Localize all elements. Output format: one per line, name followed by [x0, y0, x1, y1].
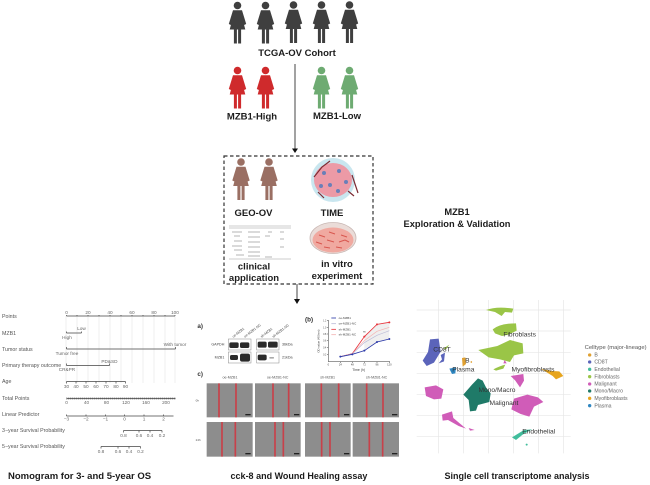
wound healing images: 24h	[196, 438, 201, 442]
chart: nomogram: 5−year Survival Probability	[2, 444, 65, 450]
western blot: sh-MZB1	[260, 327, 273, 339]
panel labels a b c: a)	[197, 323, 203, 330]
cluster: B cells	[462, 357, 472, 367]
heading: nomogram: Nomogram for 3- and 5-year OS	[8, 471, 151, 482]
cluster: Mono/Macro	[463, 378, 491, 411]
chart: nomogram: 40	[107, 310, 113, 315]
chart: nomogram: 0.8	[98, 449, 105, 454]
icon group: TCGA-OV cohort people	[229, 1, 358, 43]
chart: nomogram: PD&SD	[101, 359, 118, 364]
cluster labels: Plasma	[452, 366, 475, 373]
line chart: CCK-8: sh-MZB1-NC	[339, 333, 357, 337]
icon group: MZB1-High people	[229, 67, 274, 108]
western blot: 36kDa	[282, 343, 294, 347]
line chart: CCK-8: oe-MZB1	[339, 316, 351, 320]
chart: nomogram: 30	[64, 384, 69, 389]
chart: nomogram: −3	[64, 416, 70, 422]
label: GEO-OV: GEO-OV	[234, 208, 273, 219]
western blot: GAPDH	[211, 343, 225, 347]
chart: nomogram: Low	[77, 326, 86, 331]
chart: nomogram: Primary therapy outcome	[2, 363, 61, 369]
line chart: CCK-8: 0	[328, 363, 330, 367]
line chart: CCK-8: 0.8	[323, 334, 327, 336]
chart: nomogram: 0.2	[159, 433, 166, 438]
chart: nomogram: MZB1	[2, 331, 16, 337]
chart: nomogram: 70	[103, 384, 109, 389]
panel: exploration box	[224, 156, 373, 284]
western blot	[211, 323, 294, 363]
panel labels a b c: (b)	[305, 317, 313, 324]
icon: petri dish	[310, 222, 356, 254]
chart: nomogram: 0.6	[115, 449, 122, 454]
label: clinical application: clinical	[238, 262, 270, 272]
western blot: 21kDa	[282, 356, 294, 360]
line chart: CCK-8: 1.2	[323, 321, 327, 323]
chart: nomogram	[2, 310, 187, 454]
chart: nomogram: 0.6	[136, 433, 143, 438]
line chart: CCK-8: 120	[387, 363, 392, 367]
chart: nomogram: 0.2	[137, 449, 144, 454]
line chart: CCK-8: 96	[376, 363, 379, 367]
legend: cell type: B	[594, 353, 598, 359]
line chart: CCK-8: 0.4	[323, 348, 327, 350]
chart: single-cell UMAP	[417, 300, 647, 453]
chart: nomogram: 3−year Survival Probability	[2, 428, 65, 434]
chart: nomogram: 0	[123, 416, 126, 422]
chart: nomogram: Tumor status	[2, 347, 33, 353]
line chart: CCK-8: 0.6	[323, 341, 327, 343]
heading: MZB1-High: MZB1-High	[227, 112, 277, 122]
chart: nomogram: 80	[151, 310, 157, 315]
chart: nomogram: Points	[2, 314, 17, 320]
line chart: CCK-8: oe-MZB1-NC	[339, 322, 357, 326]
line chart: CCK-8: 0.2	[323, 355, 327, 357]
line chart: CCK-8: 72	[363, 363, 366, 367]
cluster labels: CD8T	[433, 346, 451, 353]
chart: nomogram: −2	[83, 416, 89, 422]
chart: nomogram: 100	[171, 310, 179, 315]
wound healing images: 0h	[196, 398, 199, 402]
line chart: CCK-8: 24	[339, 363, 342, 367]
chart: nomogram: 0	[65, 400, 68, 405]
cluster labels	[433, 332, 556, 435]
label: in vitro experiment line 2: experiment	[312, 271, 363, 282]
line chart: CCK-8: 1.0	[323, 327, 327, 329]
legend: cell type: Mono/Macro	[594, 389, 623, 395]
western blot: sh-MZB1-NC	[271, 323, 290, 339]
wound healing images: oe-MZB1-NC	[267, 376, 289, 380]
line chart: CCK-8: sh-MZB1	[339, 327, 351, 331]
chart: nomogram: 80	[113, 384, 119, 389]
line chart: CCK-8	[316, 316, 392, 372]
chart: nomogram: 80	[104, 400, 109, 405]
chart: nomogram: 160	[142, 400, 150, 405]
chart: nomogram: 20	[85, 310, 91, 315]
legend: cell type: CD8T	[594, 360, 609, 366]
arrow: box to results	[294, 284, 300, 304]
western blot: oe-MZB1	[231, 327, 245, 339]
chart: nomogram: 60	[129, 310, 135, 315]
chart: nomogram: 40	[84, 400, 89, 405]
chart: nomogram: 200	[162, 400, 170, 405]
legend: cell type: Plasma	[594, 403, 612, 409]
legend: cell type: Malignant	[594, 382, 617, 388]
chart: nomogram: 1	[143, 416, 146, 422]
chart: nomogram: −1	[103, 416, 109, 422]
chart: nomogram: With tumor	[164, 342, 187, 347]
table thumbnail: clinical application	[229, 226, 291, 259]
chart: nomogram: 0.4	[126, 449, 133, 454]
chart: nomogram: 0.8	[120, 433, 127, 438]
panel: cck-8 and wound healing results	[196, 316, 399, 457]
label: TIME: TIME	[321, 208, 343, 219]
label: in vitro experiment: in vitro	[321, 259, 353, 270]
chart: nomogram: High	[62, 335, 72, 340]
chart: nomogram: 0	[65, 310, 68, 315]
heading: single cell: Single cell transcriptome analysis	[444, 471, 590, 481]
icon group: MZB1-Low people	[313, 67, 358, 108]
line chart: CCK-8: OD value (450nm)	[316, 330, 320, 353]
chart: nomogram: 90	[123, 384, 128, 389]
legend: cell type: Endothelial	[594, 367, 620, 373]
wound healing images: sh-MZB1	[320, 376, 335, 380]
chart: nomogram: 120	[122, 400, 130, 405]
cluster labels: Mono/Macro	[478, 387, 516, 394]
cluster: Malignant	[425, 360, 543, 431]
heading: MZB1 Exploration and Validation: MZB1	[444, 207, 470, 217]
chart: nomogram: 40	[73, 384, 79, 389]
panel labels a b c: c)	[197, 371, 203, 378]
heading: MZB1 Exploration and Validation: Exploration & Validation	[404, 219, 511, 229]
icon group: GEO-OV people	[232, 158, 278, 200]
chart: nomogram: 50	[83, 384, 89, 389]
cluster: CD8T	[423, 339, 445, 366]
wound healing images: sh-MZB1-NC	[366, 376, 388, 380]
heading: MZB1-Low: MZB1-Low	[313, 111, 362, 122]
chart: nomogram: Linear Predictor	[2, 412, 40, 418]
heading: TCGA-OV Cohort: TCGA-OV Cohort	[258, 48, 337, 59]
cluster: Endothelial	[512, 429, 532, 446]
cluster labels: Fibroblasts	[503, 332, 537, 339]
cluster: Plasma	[449, 367, 456, 374]
arrow: cohort to exploration box	[292, 64, 298, 153]
heading: MZB1 Exploration and Validation	[404, 207, 511, 229]
chart: nomogram: 60	[93, 384, 99, 389]
chart: nomogram: Tumor free	[56, 351, 79, 356]
wound healing images	[196, 376, 399, 457]
heading: cck-8 and wound healing: cck-8 and Wound Healing assay	[231, 471, 367, 481]
line chart: CCK-8: Time (h)	[352, 368, 365, 372]
chart: nomogram: Total Points	[2, 396, 30, 402]
legend: cell type	[585, 345, 647, 409]
western blot: MZB1	[215, 356, 224, 360]
cluster labels: Myofibroblasts	[512, 366, 555, 373]
legend: cell type: Fibroblasts	[594, 374, 620, 380]
line chart: CCK-8: 48	[351, 363, 354, 367]
chart: nomogram: 2	[162, 416, 165, 422]
western blot: oe-MZB1-NC	[243, 323, 262, 339]
wound healing images: oe-MZB1	[222, 376, 238, 380]
label: clinical application line 2: application	[229, 273, 279, 284]
icon: tumor microenvironment	[311, 158, 358, 202]
cluster labels: Endothelial	[522, 428, 556, 435]
chart: nomogram: 0.4	[147, 433, 154, 438]
cluster labels: Malignant	[490, 400, 519, 407]
legend: cell type: Myofibroblasts	[594, 396, 628, 402]
cluster: Myofibroblasts	[541, 369, 563, 379]
cluster labels: B	[465, 358, 470, 365]
line chart: CCK-8: ns	[363, 331, 366, 334]
chart: nomogram: CR&PR	[59, 367, 76, 372]
chart: nomogram: Age	[2, 379, 11, 385]
panel labels a b c	[197, 317, 313, 378]
cluster: Fibroblasts	[443, 308, 523, 371]
legend: cell type: Celltype (major-lineage)	[585, 345, 647, 351]
